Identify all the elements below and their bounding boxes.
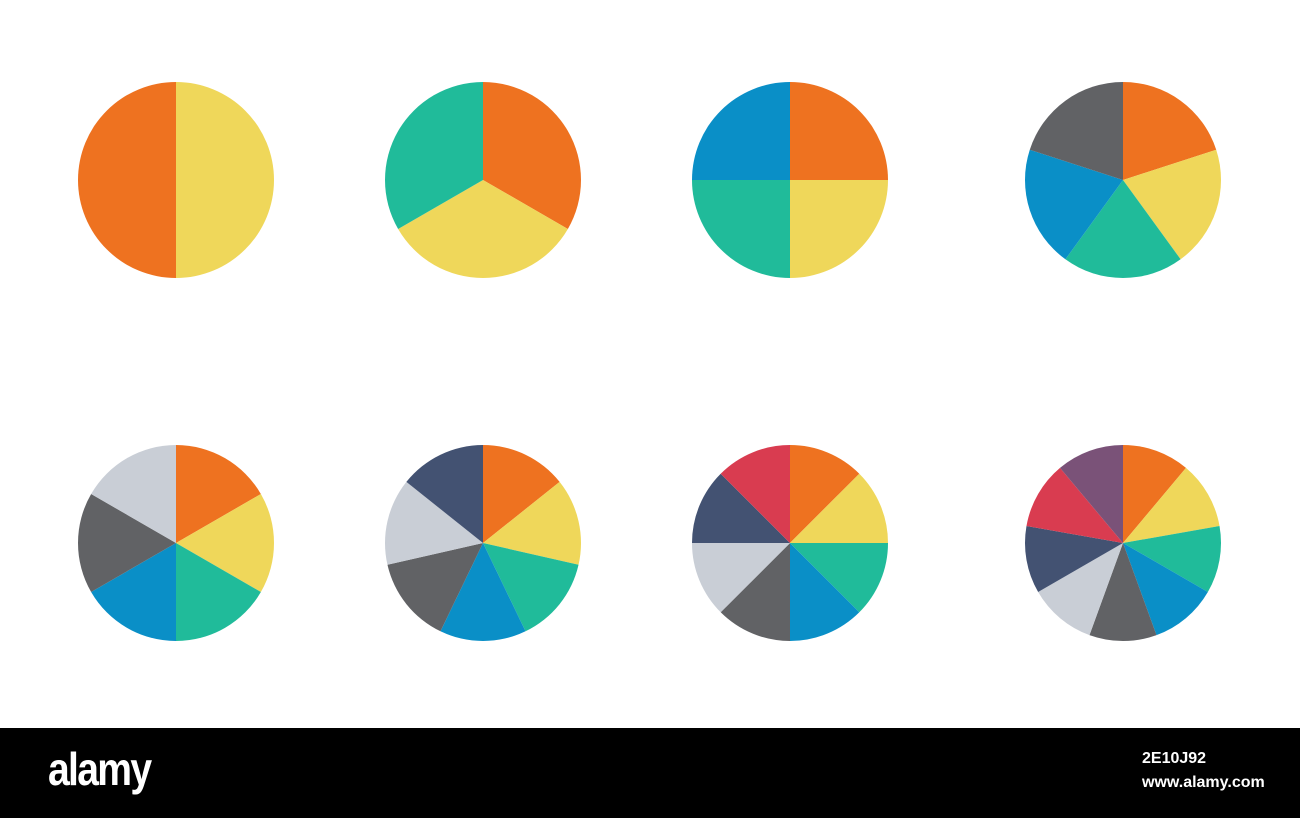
pie: 6 slices xyxy=(78,445,274,641)
pie: 9 slices xyxy=(1025,445,1221,641)
pie: 7 slices xyxy=(385,445,581,641)
website: www.alamy.com xyxy=(1142,774,1265,791)
pie: 5 slices xyxy=(1025,82,1221,278)
pie: 2 slices xyxy=(78,82,274,278)
image id: 2E10J92 xyxy=(1142,750,1206,767)
pie: 3 slices xyxy=(385,82,581,278)
pie: 4 slices xyxy=(692,82,888,278)
logo text: alamy xyxy=(48,743,150,795)
pie: 8 slices xyxy=(692,445,888,641)
footer bar xyxy=(0,728,1300,818)
